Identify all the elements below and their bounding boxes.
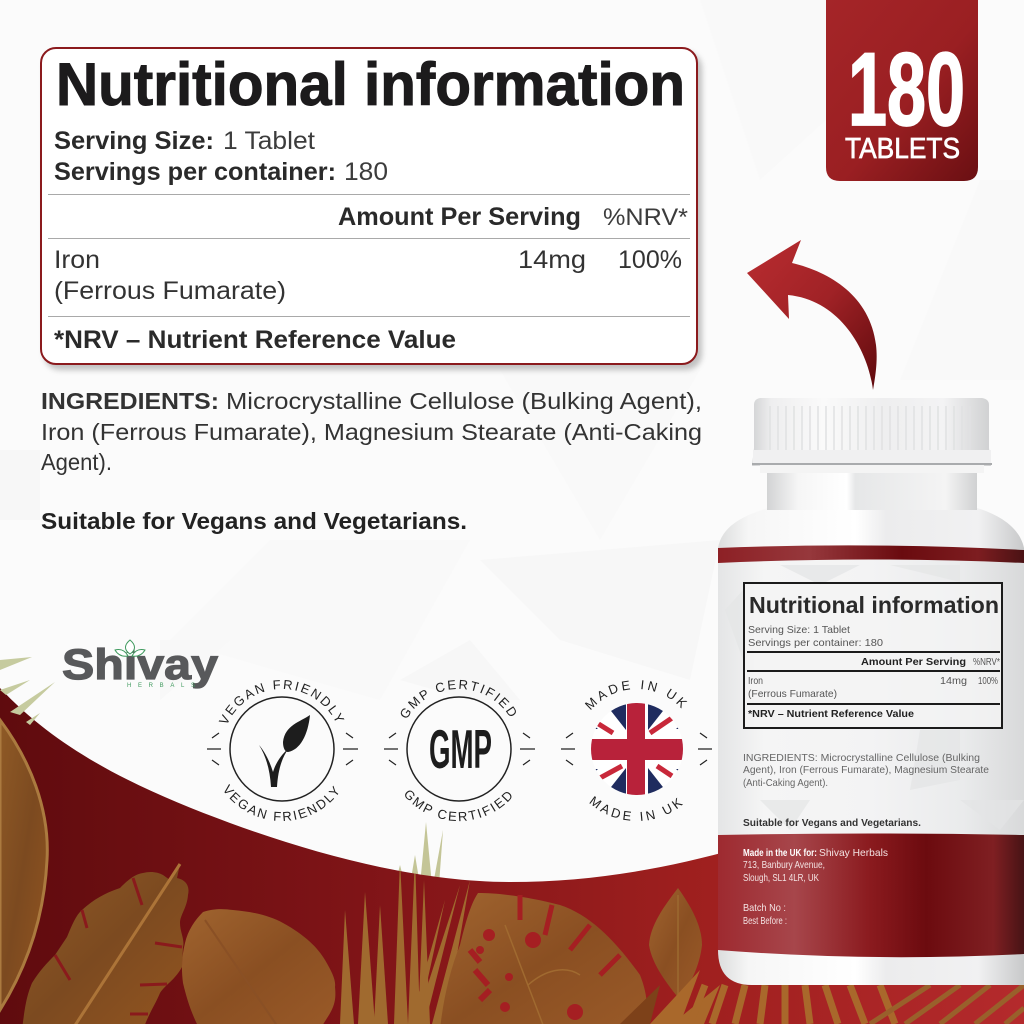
ingredients text xyxy=(41,388,702,475)
red label section: Made in the UK for: xyxy=(743,847,817,859)
tablets count tag xyxy=(826,0,978,181)
palm fronds centre xyxy=(340,855,470,1024)
servings per container: 180 xyxy=(344,158,388,186)
label nutrition box xyxy=(744,583,1002,728)
table header xyxy=(338,203,688,231)
label background xyxy=(718,560,1024,835)
palm fronds top left xyxy=(0,657,55,725)
red wave base with leaves xyxy=(0,680,1024,1024)
label ingredients: Suitable for Vegans and Vegetarians. xyxy=(743,817,921,829)
round leaf xyxy=(182,909,335,1024)
palm tips above the wave xyxy=(395,822,443,885)
badge: made in UK xyxy=(561,680,712,821)
label nutrition box: *NRV – Nutrient Reference Value xyxy=(748,708,914,720)
label nutrition box: 100% xyxy=(978,675,998,687)
nrv footnote: *NRV – Nutrient Reference Value xyxy=(54,326,456,354)
product bottle xyxy=(718,398,1024,985)
suitability statement: Suitable for Vegans and Vegetarians. xyxy=(41,508,467,534)
red band xyxy=(718,545,1024,563)
badge: GMP certified: GMP xyxy=(429,718,492,780)
label ingredients xyxy=(743,752,989,829)
red label section xyxy=(718,834,1024,957)
cap xyxy=(752,398,992,473)
label ingredients: Agent), Iron (Ferrous Fumarate), Magnesium Stearate xyxy=(743,764,989,776)
panel: nutritional information xyxy=(41,48,702,370)
red label section: Slough, SL1 4LR, UK xyxy=(743,872,819,884)
pointed leaf right xyxy=(649,888,702,996)
iron row: 100% xyxy=(618,246,682,274)
tablets count tag: TABLETS xyxy=(845,133,960,165)
label ingredients: INGREDIENTS: Microcrystalline Cellulose (Bulking xyxy=(743,752,980,764)
table header: Amount Per Serving xyxy=(338,203,581,231)
table header: %NRV* xyxy=(603,204,688,231)
badge: vegan friendly: VEGAN FRIENDLY xyxy=(218,680,344,722)
serving size: 1 Tablet xyxy=(223,127,315,155)
iron row: 14mg xyxy=(518,246,586,274)
badge: vegan friendly xyxy=(207,680,358,821)
logo: Shivay Herbals: HERBALS xyxy=(127,683,195,689)
serving size xyxy=(54,127,315,155)
fern right xyxy=(620,970,720,1024)
label nutrition box: %NRV* xyxy=(973,656,1000,668)
badge: GMP certified: GMP CERTIFIED xyxy=(405,790,512,822)
label nutrition box: (Ferrous Fumarate) xyxy=(748,688,837,700)
iron row xyxy=(54,246,682,305)
heading: Nutritional information xyxy=(56,51,685,118)
badge: made in UK: MADE IN UK xyxy=(584,680,688,710)
badge: vegan friendly: VEGAN FRIENDLY xyxy=(224,784,338,821)
ingredients text: Microcrystalline Cellulose (Bulking Agent), xyxy=(226,388,702,414)
label ingredients: (Anti-Caking Agent). xyxy=(743,777,828,789)
ingredients text: Agent). xyxy=(41,449,112,475)
neck xyxy=(767,466,977,510)
ingredients text: Iron (Ferrous Fumarate), Magnesium Stearate (Anti-Caking xyxy=(41,419,702,445)
big left leaf xyxy=(0,720,47,1010)
bottle body xyxy=(718,508,1024,985)
badge: GMP certified xyxy=(384,680,535,822)
servings per container: Servings per container: xyxy=(54,158,336,186)
palm fronds below bottle xyxy=(690,985,1024,1024)
iron row: Iron xyxy=(54,246,100,274)
red label section: Best Before : xyxy=(743,915,787,927)
serving size: Serving Size: xyxy=(54,127,214,155)
label nutrition box: Iron xyxy=(748,675,763,687)
label nutrition box: Nutritional information xyxy=(749,592,999,618)
tablets count tag: 180 xyxy=(848,32,965,148)
badge: GMP certified: GMP CERTIFIED xyxy=(400,680,516,718)
label polygons xyxy=(725,565,1024,830)
badge: made in UK: MADE IN UK xyxy=(589,796,683,821)
label nutrition box: Amount Per Serving xyxy=(861,656,966,668)
arrow xyxy=(747,240,877,390)
label nutrition box: Serving Size: 1 Tablet xyxy=(748,624,850,636)
label nutrition box: Servings per container: 180 xyxy=(748,637,883,649)
iron row: (Ferrous Fumarate) xyxy=(54,277,286,305)
red label section: Batch No : xyxy=(743,902,786,914)
label nutrition box: 14mg xyxy=(940,675,967,687)
ingredients text: INGREDIENTS: xyxy=(41,388,219,414)
red label section: 713, Banbury Avenue, xyxy=(743,859,825,871)
logo: Shivay Herbals: Shivay xyxy=(62,641,218,689)
red label section: Shivay Herbals xyxy=(819,847,888,859)
banana leaf xyxy=(22,864,189,1024)
monstera leaf xyxy=(440,893,647,1024)
